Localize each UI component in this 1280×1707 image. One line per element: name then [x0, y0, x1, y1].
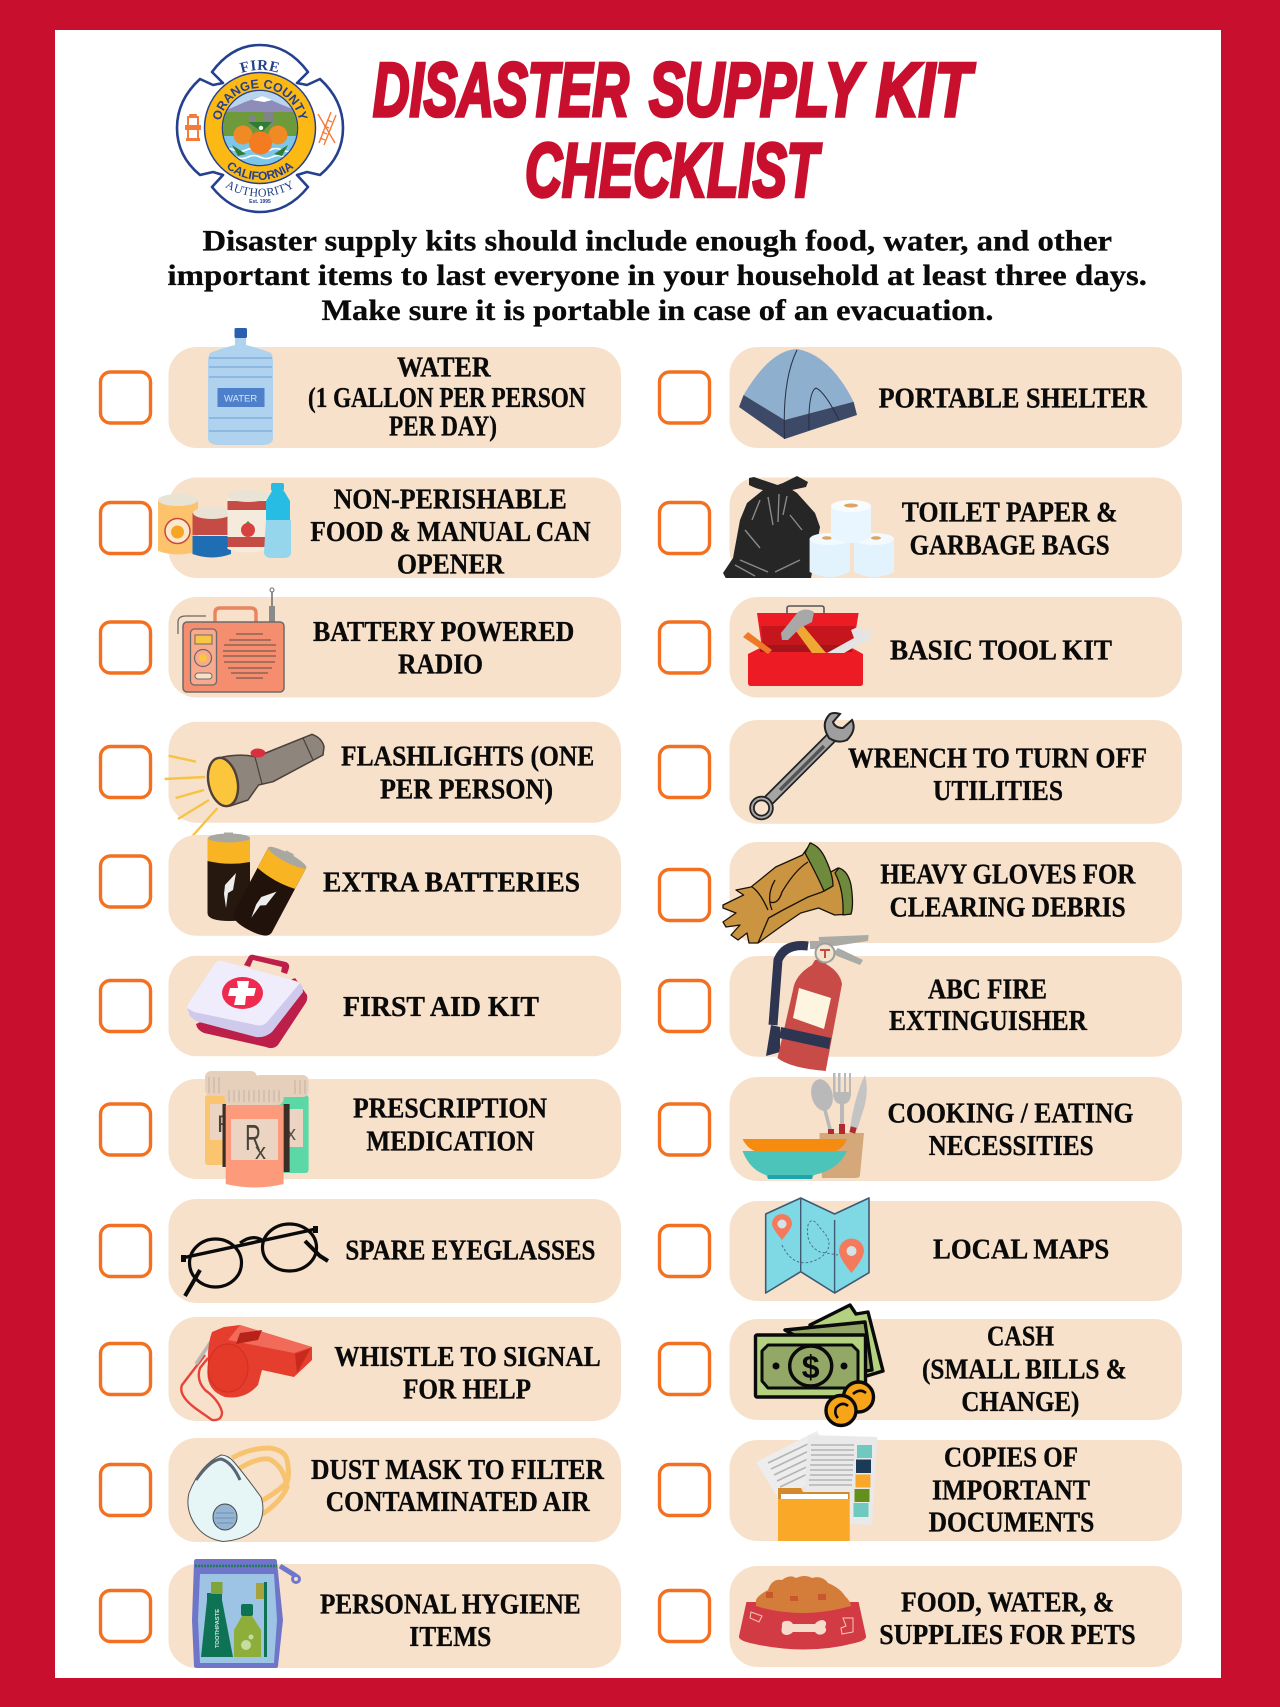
label: PRESCRIPTION	[353, 1094, 547, 1125]
label	[889, 974, 1088, 1037]
label: MEDICATION	[366, 1126, 534, 1157]
label: TOILET PAPER &	[902, 498, 1118, 529]
label: FIRST AID KIT	[343, 992, 539, 1023]
label: PER DAY)	[389, 412, 497, 443]
icon: whistle	[181, 1325, 312, 1420]
title	[373, 48, 975, 214]
icon: water bottle: WATER	[224, 394, 257, 404]
icon: folded map	[766, 1198, 869, 1293]
label	[310, 484, 591, 580]
label: NECESSITIES	[929, 1131, 1094, 1162]
panel: wrench	[660, 713, 1182, 824]
label	[880, 860, 1136, 923]
icon: tool box	[743, 606, 873, 686]
icon: medication bottles: R	[217, 1111, 234, 1138]
label	[929, 1443, 1094, 1539]
title: DISASTER	[373, 48, 629, 133]
panel: toilet paper and garbage bags	[660, 476, 1182, 578]
panel: hygiene	[100, 1559, 621, 1668]
icon: first aid kit	[187, 955, 307, 1048]
panel: water	[100, 328, 621, 448]
logo: Orange County Fire Authority badge: Est. 1995	[249, 199, 271, 205]
label: WHISTLE TO SIGNAL	[334, 1342, 601, 1373]
logo: Orange County Fire Authority badge: FIRE	[239, 60, 279, 73]
label	[353, 1094, 547, 1157]
label: EXTRA BATTERIES	[323, 868, 580, 899]
label: GARBAGE BAGS	[910, 530, 1110, 561]
label	[888, 1098, 1134, 1162]
label: PER PERSON)	[380, 774, 553, 805]
panel: dust mask	[100, 1438, 621, 1542]
label	[311, 1455, 605, 1518]
panel: maps	[660, 1198, 1182, 1301]
icon: batteries	[208, 832, 309, 940]
panel: tool kit	[660, 597, 1182, 698]
icon: toilet paper rolls	[810, 500, 894, 577]
label: BATTERY POWERED	[313, 617, 574, 648]
icon: medication bottles	[205, 1071, 309, 1188]
label: CLEARING DEBRIS	[890, 892, 1126, 923]
icon: utensils and bowls	[742, 1073, 867, 1179]
label: CASH	[987, 1322, 1054, 1353]
panel: pets	[660, 1566, 1182, 1667]
label	[848, 743, 1147, 807]
label: PERSONAL HYGIENE	[320, 1589, 581, 1620]
icon: eyeglasses	[181, 1224, 328, 1296]
icon: toiletry bag: TOOTHPASTE	[215, 1609, 221, 1648]
icon: wrench	[752, 713, 854, 818]
panel: documents	[660, 1431, 1182, 1541]
label: CHANGE)	[961, 1387, 1079, 1418]
label	[879, 1588, 1136, 1651]
label	[341, 742, 594, 805]
label: EXTINGUISHER	[889, 1006, 1088, 1037]
title: SUPPLY	[649, 48, 865, 133]
label: FOR HELP	[403, 1374, 531, 1405]
intro text: Disaster supply kits should include enough food, water, and other	[202, 224, 1112, 258]
logo: Orange County Fire Authority badge: AUTHORITY	[225, 180, 292, 197]
icon: documents and folder	[756, 1431, 878, 1541]
title: CHECKLIST	[525, 128, 822, 214]
label: CONTAMINATED AIR	[326, 1487, 590, 1518]
icon: cash and coins	[756, 1305, 883, 1426]
icon: flashlight	[165, 734, 324, 836]
panel: cooking	[660, 1073, 1182, 1181]
panel: first aid	[100, 955, 621, 1056]
panel: eyeglasses	[100, 1199, 621, 1303]
label: SUPPLIES FOR PETS	[879, 1620, 1136, 1651]
label: DUST MASK TO FILTER	[311, 1455, 605, 1486]
label: WRENCH TO TURN OFF	[848, 743, 1147, 774]
label	[922, 1322, 1127, 1418]
icon: pet food bowl	[739, 1576, 866, 1650]
label: FOOD & MANUAL CAN	[310, 517, 591, 548]
icon: dust mask	[188, 1448, 288, 1542]
title: KIT	[876, 48, 975, 133]
panel: gloves	[660, 842, 1182, 943]
panel: whistle	[100, 1317, 621, 1421]
panel: food	[100, 478, 621, 580]
label	[334, 1342, 601, 1405]
label: PORTABLE SHELTER	[879, 383, 1148, 414]
panel: fire extinguisher	[660, 935, 1182, 1071]
logo: Orange County Fire Authority badge: ORANGE COUNTY	[213, 79, 308, 120]
panel: shelter	[660, 347, 1182, 448]
label: UTILITIES	[933, 776, 1063, 807]
label: COOKING / EATING	[888, 1098, 1134, 1129]
label: FOOD, WATER, &	[901, 1588, 1114, 1619]
panel: batteries	[100, 832, 621, 940]
icon: radio	[178, 588, 284, 692]
label	[308, 353, 586, 443]
label: NON-PERISHABLE	[334, 484, 567, 515]
label: SPARE EYEGLASSES	[345, 1235, 595, 1266]
icon: medication bottles: R	[245, 1117, 261, 1158]
label: ABC FIRE	[928, 974, 1047, 1005]
dollar sign: $	[802, 1349, 820, 1385]
icon: cans and bottle	[158, 483, 291, 558]
label: RADIO	[398, 649, 483, 680]
icon: work gloves	[723, 843, 852, 943]
icon: fire extinguisher	[766, 935, 869, 1071]
label: IMPORTANT	[932, 1475, 1090, 1506]
label: (SMALL BILLS &	[922, 1354, 1127, 1385]
panel: prescription	[100, 1071, 621, 1188]
label: LOCAL MAPS	[933, 1234, 1109, 1265]
label: WATER	[397, 353, 491, 384]
icon: tent	[739, 349, 857, 439]
label: DOCUMENTS	[929, 1508, 1094, 1539]
label: BASIC TOOL KIT	[890, 635, 1112, 666]
intro text: Make sure it is portable in case of an evacuation.	[322, 294, 994, 327]
label: HEAVY GLOVES FOR	[880, 860, 1136, 891]
panel: radio	[100, 588, 621, 698]
intro text: important items to last everyone in your household at least three days.	[168, 259, 1147, 292]
label: FLASHLIGHTS (ONE	[341, 742, 594, 773]
label: OPENER	[397, 549, 505, 580]
logo: Orange County Fire Authority badge: CALIFORNIA	[228, 162, 294, 180]
label: COPIES OF	[944, 1443, 1078, 1474]
logo: Orange County Fire Authority badge	[176, 44, 344, 214]
icon: toiletry bag	[192, 1559, 301, 1668]
label	[313, 617, 574, 680]
intro text	[168, 224, 1147, 327]
label: ITEMS	[409, 1622, 491, 1653]
panel: flashlight	[100, 722, 621, 836]
label	[320, 1589, 581, 1653]
icon: medication bottles: x	[286, 1123, 296, 1145]
icon: garbage bag	[723, 476, 820, 578]
label	[902, 498, 1118, 561]
label: (1 GALLON PER PERSON	[308, 383, 586, 414]
icon: water bottle	[208, 328, 273, 445]
icon: medication bottles: x	[255, 1139, 266, 1164]
panel: cash	[660, 1305, 1182, 1426]
